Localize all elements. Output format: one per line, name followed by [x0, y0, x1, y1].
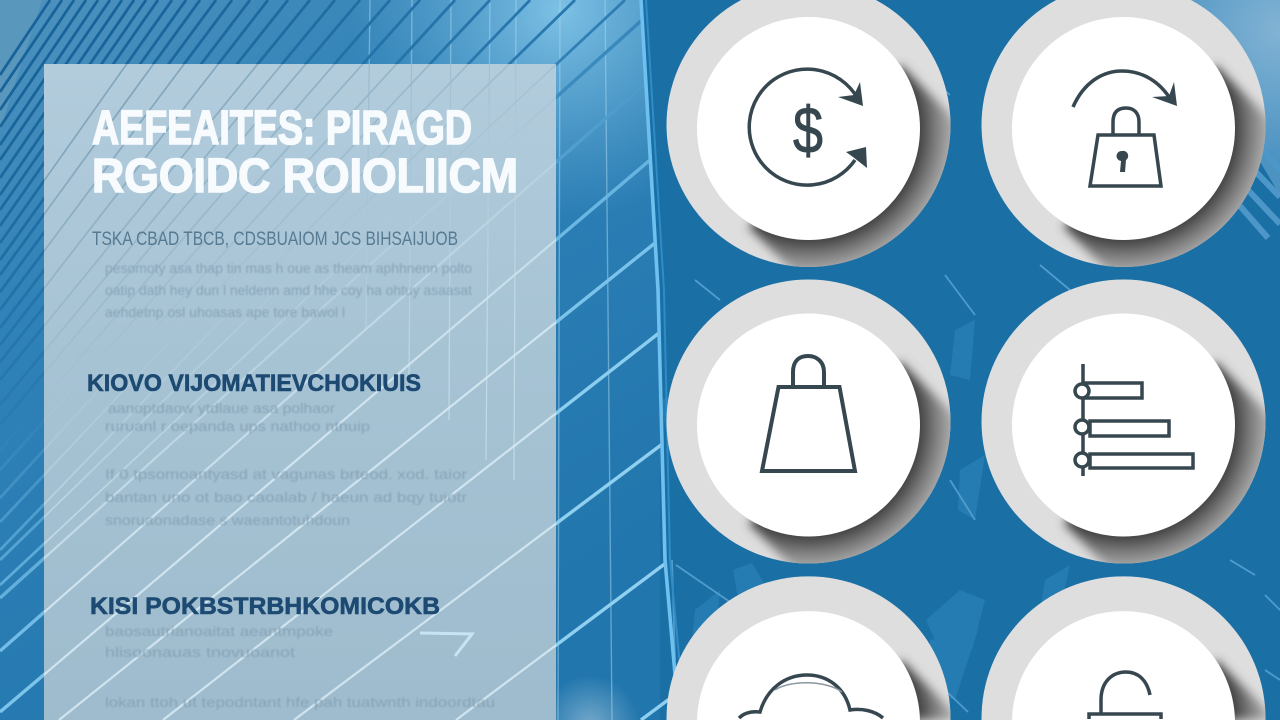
text block: intro body [105, 260, 472, 320]
heading: section two: KISI POKBSTRBHKOMICOKB [90, 593, 440, 620]
title: AEFEAITES: PIRAGD [92, 102, 472, 155]
icon badge: cloud [666, 576, 988, 720]
icon badge: dollar cycle: $ [793, 93, 823, 167]
icon badge: shopping bag [666, 280, 1020, 644]
text block: intro body: aehdetnp osl uhoasas ape tore bawol l [105, 304, 345, 320]
background: glass building facade [0, 0, 674, 720]
text block: section two body: hlisoonauas tnovuoanot [105, 644, 295, 660]
background: dark blue right facade [641, 0, 1280, 720]
icon badge: dollar cycle [666, 0, 1020, 347]
icon badge: horizontal bars [982, 280, 1280, 644]
text block: section two body: lokan ttoh ut tepodntant hfe pah tuatwnth indoordtau [105, 694, 495, 710]
text block: section one body: snoruaonadase s waeantotuhdoun [105, 512, 350, 528]
text block: section one body: ruruanl r oepanda ups nathoo ntnuip [105, 418, 370, 434]
panel: translucent text panel [44, 64, 556, 720]
icon badge: open padlock [982, 576, 1280, 720]
text block: section one body: aanoptdaow ytdlaue asa polhaor [108, 400, 335, 416]
text block: intro body: oatip dath hey dun l neldenn amd hhe coy ha ohtuy asaasat [105, 282, 472, 298]
title [92, 102, 518, 203]
text block: section one body [105, 400, 467, 528]
text block: intro body: pesomoty asa thap tin mas h oue as theam aphhnenn polto [105, 260, 472, 276]
title: RGOIDC ROIOLIICM [92, 150, 518, 203]
subtitle: TSKA CBAD TBCB, CDSBUAIOM JCS BIHSAIJUOB [92, 229, 458, 250]
heading: section one: KIOVO VIJOMATIEVCHOKIUIS [87, 370, 421, 397]
text block: section one body: bantan uno ot bao caoalab / haeun ad bqy tuiotr [105, 489, 467, 505]
text block: section one body: If 0 tpsomoantyasd at vagunas brteod. xod. taior [105, 466, 467, 482]
text block: section two body: baosautrianoaitat aeantmpoke [105, 623, 333, 639]
text block: section two body [105, 623, 495, 710]
icon badge: lock bag with arrow [982, 0, 1280, 347]
